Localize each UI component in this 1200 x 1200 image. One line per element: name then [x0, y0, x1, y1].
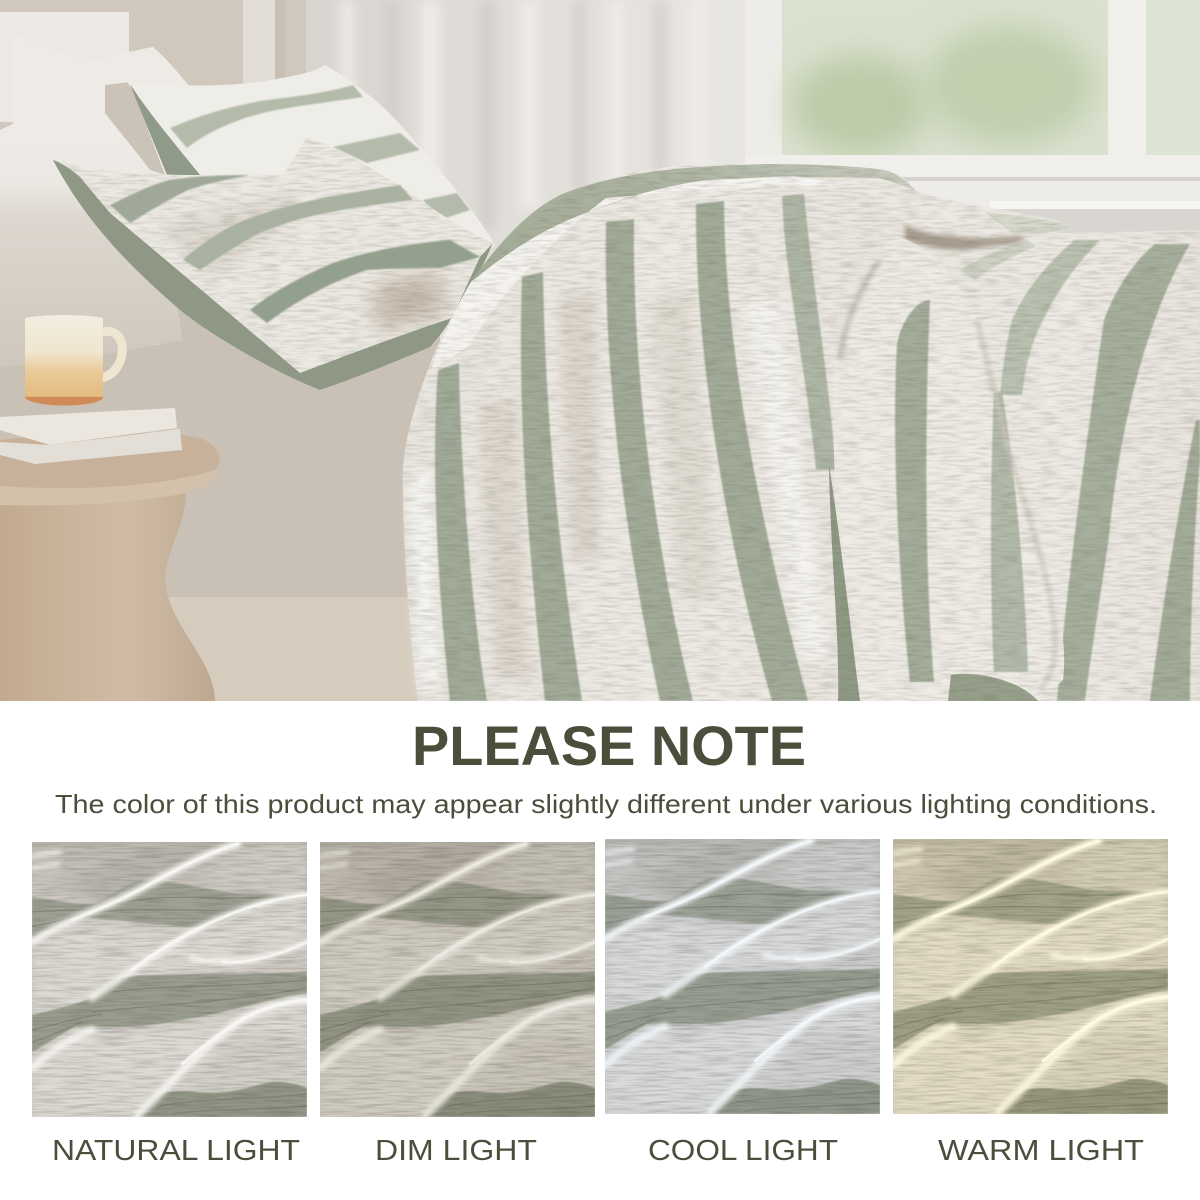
sheer curtain — [306, 0, 710, 234]
front sham texture — [60, 138, 492, 372]
window — [745, 0, 1200, 240]
label: warm light: WARM LIGHT — [938, 1135, 1144, 1167]
books — [0, 408, 182, 464]
white rim fold — [431, 177, 860, 370]
swatch: warm light — [893, 839, 1168, 1114]
swatch: dim light — [320, 842, 595, 1117]
back sham green edge — [130, 84, 200, 175]
back white pillows — [0, 33, 190, 367]
comforter main drape — [403, 164, 1073, 701]
comforter top flap — [790, 177, 1073, 235]
swatch: natural light — [32, 842, 307, 1117]
bed sheet — [0, 308, 440, 597]
label: natural light: NATURAL LIGHT — [52, 1135, 300, 1167]
striped front sham — [50, 130, 500, 395]
comforter crinkle texture — [400, 160, 1200, 701]
beige shading — [560, 290, 600, 560]
title: PLEASE NOTE — [412, 714, 806, 777]
green underside — [468, 164, 915, 286]
headboard — [0, 0, 306, 130]
flap shadow gap — [905, 225, 1025, 250]
comforter bulge fold — [829, 237, 1064, 701]
bulge left shadow — [840, 260, 880, 360]
label: dim light: DIM LIGHT — [375, 1135, 537, 1167]
side table — [0, 432, 219, 701]
comforter right body — [961, 230, 1200, 701]
comforter stripes — [435, 194, 836, 701]
mug — [25, 315, 122, 406]
label: cool light: COOL LIGHT — [648, 1135, 838, 1167]
striped back sham — [127, 65, 495, 249]
bulge hem and underside — [948, 674, 1038, 701]
swatch: cool light — [605, 839, 880, 1114]
subtitle: The color of this product may appear slightly different under various lighting conditions. — [55, 789, 1157, 819]
front sham beige shading — [375, 272, 445, 330]
front sham green flap — [53, 160, 493, 390]
bedroom photo — [0, 0, 1200, 701]
bed skirt — [168, 597, 418, 701]
